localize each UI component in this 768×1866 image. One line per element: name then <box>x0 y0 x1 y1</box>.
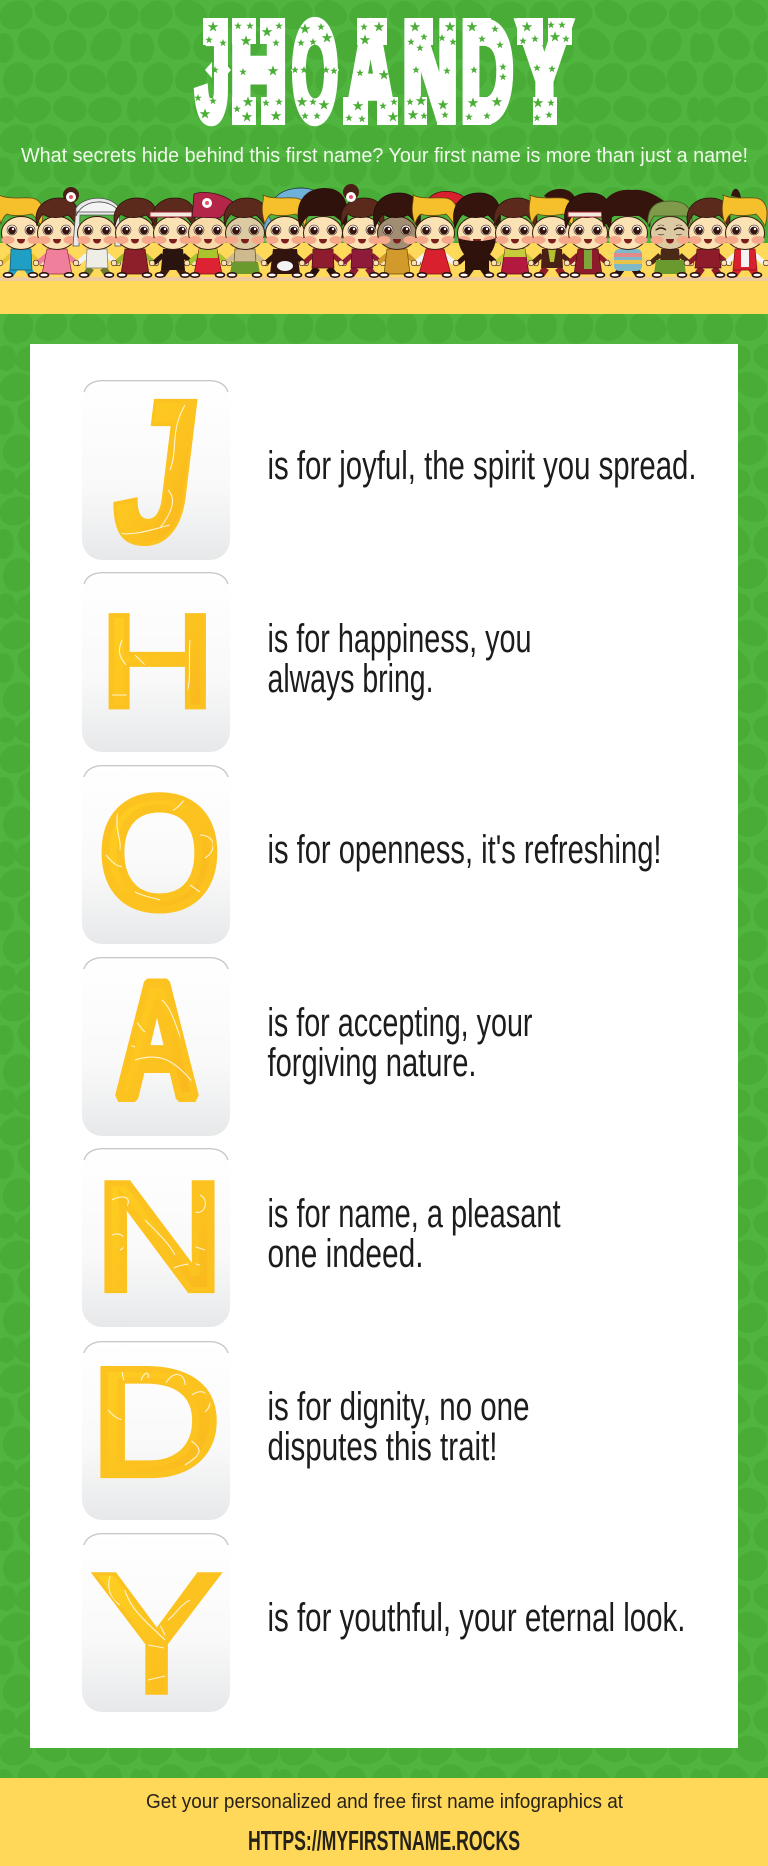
tile H <box>82 572 230 752</box>
child 7: tan skin, blue cap, grass skirt <box>221 198 271 277</box>
tile A: A <box>116 948 199 1133</box>
footer text: Get your personalized and free first name infographics at <box>146 1791 623 1813</box>
footer band <box>0 1778 768 1866</box>
child 5: patterned band, black outfit <box>149 198 197 277</box>
text N: is for name, a pleasant <box>268 1192 560 1236</box>
title: JHOANDY star lettering: J <box>196 0 229 148</box>
child 17: big black hair, rainbow striped top <box>601 190 668 277</box>
child 2: brown hair with flower, pink kimono <box>33 187 81 277</box>
child 10: brown hair with flower, maroon outfit <box>338 184 386 277</box>
text A: is for accepting, your <box>268 1001 532 1045</box>
row D <box>82 1335 530 1520</box>
title: JHOANDY star lettering <box>194 0 572 149</box>
row N <box>82 1148 560 1327</box>
footer url: HTTPS://MYFIRSTNAME.ROCKS <box>248 1825 520 1856</box>
child 1: blond, blue overalls <box>0 195 45 277</box>
tile J: J <box>103 356 211 586</box>
child 12: blond with red cap, red dress <box>411 191 467 277</box>
text D <box>268 1385 530 1469</box>
child 8: blond, dark robe with white apron <box>261 188 317 277</box>
row O <box>82 763 662 944</box>
child 4: brown hair, maroon robe <box>111 198 159 277</box>
row Y <box>82 1533 686 1730</box>
child 6: red hat, red skirt <box>184 192 236 277</box>
tile Y: Y <box>90 1537 223 1730</box>
tile J <box>82 380 230 560</box>
tile D: D <box>89 1335 222 1508</box>
tile N: N <box>93 1151 226 1324</box>
text D: disputes this trait! <box>268 1425 498 1469</box>
child 13: black hood and beard <box>453 193 501 277</box>
tile A <box>82 948 230 1136</box>
illustration: row of children holding hands <box>0 184 768 277</box>
child 18: leaf hat, grass skirt <box>646 201 694 277</box>
text H: is for happiness, you <box>268 617 532 661</box>
text A: forgiving nature. <box>268 1041 476 1085</box>
row J <box>82 356 696 586</box>
title: JHOANDY star lettering: D <box>461 0 513 149</box>
text H: always bring. <box>268 657 434 701</box>
child 16: patterned band, maroon robe with green stripe <box>564 193 612 277</box>
text N <box>268 1192 560 1276</box>
text D: is for dignity, no one <box>268 1385 530 1429</box>
row A <box>82 948 532 1136</box>
title: JHOANDY star lettering: N <box>403 0 458 148</box>
title: JHOANDY star lettering: O <box>292 0 338 149</box>
child 11: dark skin, golden robe <box>373 193 421 277</box>
panel: white content card <box>30 344 738 1748</box>
text H <box>268 617 532 701</box>
child 9: tall black hat, maroon jacket <box>298 188 348 277</box>
child 15: blond quiff, maroon trousers <box>528 189 576 277</box>
child 19: brown hair, maroon robe <box>684 198 732 277</box>
child 14: brown hair, dotted red skirt <box>491 198 539 277</box>
child 20: blond, red and white costume <box>721 189 768 277</box>
text N: one indeed. <box>268 1232 424 1276</box>
subtitle: What secrets hide behind this first name? Your first name is more than just a name! <box>21 145 748 167</box>
child 3: white headdress, olive trousers <box>73 198 121 277</box>
banner: yellow strip <box>0 243 768 314</box>
tile O: O <box>98 763 221 942</box>
row H <box>82 572 532 752</box>
text A <box>268 1001 532 1085</box>
tile H: H <box>98 587 216 736</box>
